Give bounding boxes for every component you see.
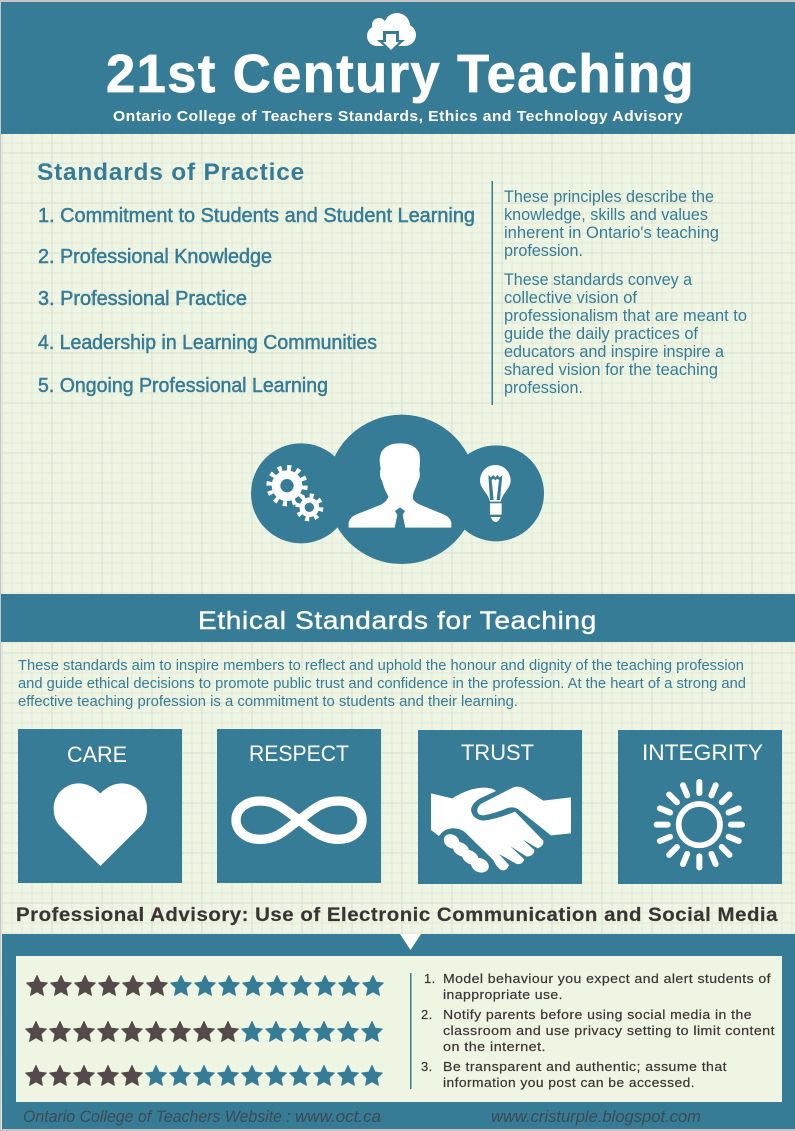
footer: website credits <box>23 1107 701 1126</box>
text block: description of principles: knowledge, skills and values <box>504 205 708 224</box>
text block: description of principles: These standards convey a <box>504 270 693 289</box>
title: 21st Century Teaching <box>106 44 695 104</box>
icon: sun <box>657 782 742 867</box>
header banner <box>1 2 795 134</box>
text block: description of principles: guide the daily practices of <box>504 324 698 343</box>
panel: trust: TRUST <box>461 740 534 765</box>
numbered advisory list: classroom and use privacy setting to limit content <box>443 1023 775 1038</box>
text block: ethical standards intro: effective teaching profession is a commitment to students and their learning. <box>18 693 518 710</box>
list of five standards: 2. Professional Knowledge <box>38 246 272 268</box>
list of five standards: 5. Ongoing Professional Learning <box>38 375 328 397</box>
text block: ethical standards intro <box>18 657 746 710</box>
icon: handshake <box>431 787 571 875</box>
icon: cloud download <box>367 13 416 52</box>
text block: description of principles: inherent in Ontario's teaching <box>504 223 719 242</box>
text block: description of principles: collective vision of <box>504 288 637 307</box>
icon: professional silhouette <box>349 443 451 528</box>
numbered advisory list <box>421 971 775 1090</box>
icon group: gears, professional, light bulb <box>251 415 544 564</box>
numbered advisory list: information you post can be accessed. <box>443 1075 695 1090</box>
subtitle: Ontario College of Teachers Standards, Ethics and Technology Advisory <box>113 108 683 125</box>
icon: heart <box>54 783 147 866</box>
text block: description of principles <box>504 187 747 397</box>
panel: advisory <box>2 934 795 1129</box>
numbered advisory list: Notify parents before using social media in the <box>443 1007 752 1022</box>
panel: respect <box>217 729 381 883</box>
list of five standards: 4. Leadership in Learning Communities <box>38 332 377 354</box>
panel: integrity <box>618 730 782 884</box>
numbered advisory list: 1. <box>424 971 436 986</box>
section banner: ethical standards: Ethical Standards for Teaching <box>198 607 597 635</box>
text block: description of principles: educators and inspire inspire a <box>504 342 725 361</box>
text block: description of principles: shared vision for the teaching <box>504 360 718 379</box>
heading: professional advisory: Professional Advisory: Use of Electronic Communication and Social Media <box>16 904 778 926</box>
icon: gears <box>269 468 321 519</box>
numbered advisory list: Be transparent and authentic; assume that <box>443 1059 727 1074</box>
stars row 1 <box>27 976 383 995</box>
arrow: pointer triangle <box>400 934 421 950</box>
stars row 3 <box>26 1066 382 1085</box>
numbered advisory list: on the internet. <box>443 1039 546 1054</box>
panel: respect: RESPECT <box>249 741 349 766</box>
panel: standards of practice <box>37 159 747 405</box>
star rating rows <box>26 976 383 1085</box>
icon: infinity <box>236 801 362 839</box>
panel: care: CARE <box>67 742 127 767</box>
text block: description of principles: profession. <box>504 241 583 260</box>
footer: website credits: : <box>286 1107 291 1126</box>
section banner: ethical standards <box>1 594 795 642</box>
text block: ethical standards intro: and guide ethical decisions to promote public trust and confidence in the profession. At the heart of a strong and <box>18 675 746 692</box>
panel: care <box>18 729 182 883</box>
icon: light bulb <box>480 465 511 522</box>
numbered advisory list: 3. <box>421 1059 433 1074</box>
list of five standards: 3. Professional Practice <box>38 288 247 310</box>
text block: description of principles: professionalism that are meant to <box>504 306 747 325</box>
footer: website credits: Ontario College of Teachers Website <box>23 1107 282 1126</box>
numbered advisory list: 2. <box>421 1007 433 1022</box>
text block: ethical standards intro: These standards aim to inspire members to reflect and uphold the honour and dignity of the teaching profession <box>18 657 744 674</box>
numbered advisory list: Model behaviour you expect and alert students of <box>443 971 771 986</box>
stars row 2 <box>26 1022 382 1041</box>
text block: description of principles: These principles describe the <box>504 187 714 206</box>
footer: website credits: www.oct.ca <box>295 1107 381 1126</box>
panel: trust <box>418 730 582 884</box>
list of five standards: 1. Commitment to Students and Student Learning <box>38 205 475 227</box>
heading: standards of practice: Standards of Practice <box>37 159 305 186</box>
text block: description of principles: profession. <box>504 378 583 397</box>
list of five standards <box>38 205 475 397</box>
numbered advisory list: inappropriate use. <box>443 987 563 1002</box>
panel: integrity: INTEGRITY <box>642 740 763 765</box>
footer: website credits: www.cristurple.blogspot.com <box>491 1107 701 1126</box>
